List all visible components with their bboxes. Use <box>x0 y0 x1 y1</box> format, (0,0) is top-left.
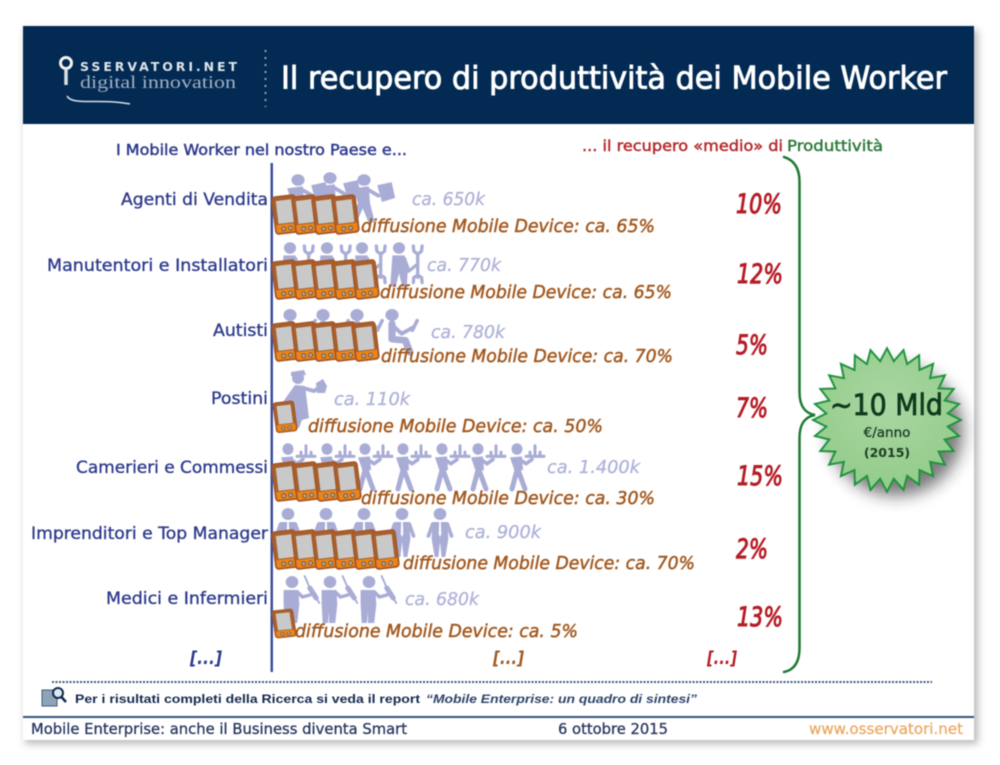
row: Camerieri e Commessi: diffusione Mobile Device: ca. 30% <box>361 488 655 509</box>
title: Il recupero di produttività dei Mobile Worker <box>281 60 947 96</box>
row: Agenti di Vendita: ca. 650k <box>412 190 486 210</box>
right column heading <box>582 137 883 155</box>
row: Postini <box>211 370 768 437</box>
footer: www.osservatori.net <box>809 720 963 738</box>
right column heading: Produttività <box>787 137 883 155</box>
report note: “Mobile Enterprise: un quadro di sintesi” <box>426 692 697 706</box>
dotted separator <box>52 681 932 683</box>
row: Postini: ca. 110k <box>334 390 411 410</box>
icon: report with magnifier <box>42 688 66 706</box>
row: Camerieri e Commessi: ca. 1.400k <box>547 458 641 478</box>
logo: SSERVATORI.NET <box>80 59 237 74</box>
row: Imprenditori e Top Manager <box>31 508 768 574</box>
row: Autisti: Autisti <box>213 321 268 341</box>
row: Medici e Infermieri: 13% <box>737 602 783 633</box>
row: Autisti <box>213 309 768 367</box>
starburst callout: ~10 Mld <box>830 388 943 422</box>
left column heading: I Mobile Worker nel nostro Paese e... <box>116 141 407 159</box>
row: Imprenditori e Top Manager: 2% <box>736 534 768 565</box>
footer <box>23 716 974 738</box>
green brace <box>784 157 815 672</box>
row: Manutentori e Installatori <box>47 242 783 303</box>
row: Imprenditori e Top Manager: diffusione Mobile Device: ca. 70% <box>403 553 695 574</box>
footer: Mobile Enterprise: anche il Business diventa Smart <box>31 720 407 738</box>
row: Imprenditori e Top Manager: Imprenditori e Top Manager <box>31 524 268 544</box>
row: Postini: 7% <box>736 393 768 424</box>
row: Autisti: ca. 780k <box>431 323 506 343</box>
row: Manutentori e Installatori: diffusione Mobile Device: ca. 65% <box>380 282 672 303</box>
row: Camerieri e Commessi: 15% <box>737 461 783 492</box>
row: Agenti di Vendita: 10% <box>736 189 782 220</box>
ellipsis markers <box>189 648 738 669</box>
row: Manutentori e Installatori: 12% <box>737 259 783 290</box>
starburst callout: €/anno <box>864 425 910 441</box>
ellipsis markers: [...] <box>706 648 738 669</box>
report note <box>75 692 697 706</box>
row: Medici e Infermieri: ca. 680k <box>405 590 480 610</box>
row: Camerieri e Commessi <box>76 443 783 509</box>
row: Agenti di Vendita <box>121 172 782 237</box>
row: Agenti di Vendita: diffusione Mobile Device: ca. 65% <box>361 216 655 237</box>
row: Autisti: diffusione Mobile Device: ca. 70% <box>381 346 673 367</box>
row: Camerieri e Commessi: Camerieri e Commessi <box>76 458 268 478</box>
row: Medici e Infermieri: Medici e Infermieri <box>106 589 268 609</box>
row: Agenti di Vendita: Agenti di Vendita <box>121 190 268 210</box>
row: Imprenditori e Top Manager: ca. 900k <box>465 523 542 543</box>
row: Manutentori e Installatori: ca. 770k <box>427 256 502 276</box>
row: Manutentori e Installatori: Manutentori e Installatori <box>47 256 268 276</box>
row: Medici e Infermieri: diffusione Mobile Device: ca. 5% <box>295 621 578 642</box>
row: Postini: diffusione Mobile Device: ca. 50% <box>308 416 603 437</box>
right column heading: ... il recupero «medio» di <box>582 137 783 155</box>
report note: Per i risultati completi della Ricerca si veda il report <box>75 692 420 706</box>
row: Medici e Infermieri <box>106 576 783 642</box>
row: Autisti: 5% <box>736 330 768 361</box>
logo <box>60 58 237 104</box>
logo: digital innovation <box>80 72 236 92</box>
ellipsis markers: [...] <box>492 648 525 669</box>
footer: 6 ottobre 2015 <box>558 720 668 738</box>
ellipsis markers: [...] <box>189 648 223 669</box>
header band <box>23 26 974 124</box>
starburst callout <box>813 348 970 503</box>
vertical axis <box>270 163 273 672</box>
starburst callout: (2015) <box>864 445 910 460</box>
row: Postini: Postini <box>211 389 268 409</box>
